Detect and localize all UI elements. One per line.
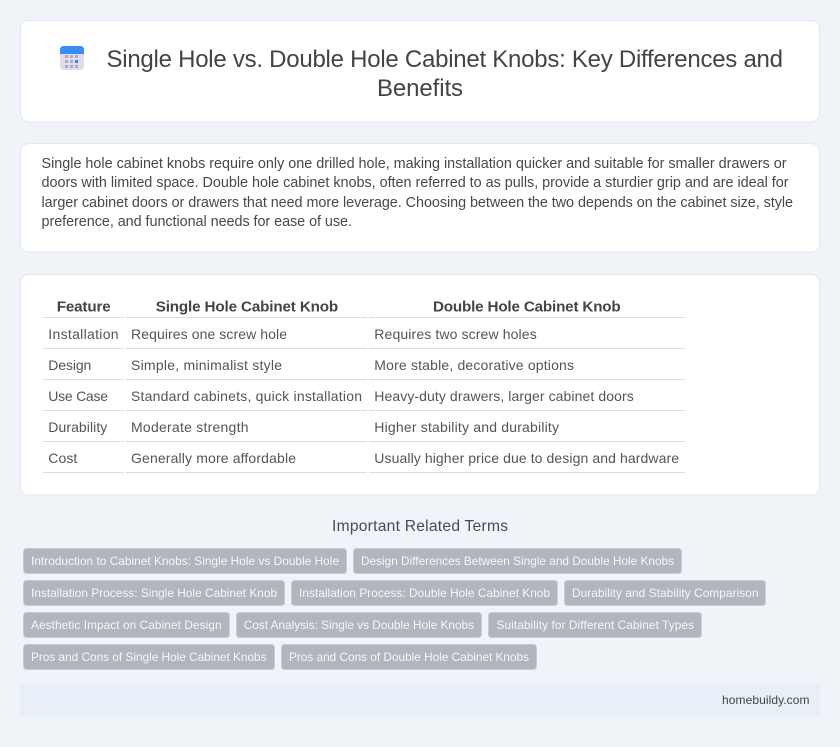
table row: durability: Higher stability and durability — [374, 419, 559, 435]
table row: durability: Durability — [48, 419, 107, 435]
tag — [24, 580, 284, 606]
table row: installation — [48, 326, 537, 342]
table row: use case: Heavy-duty drawers, larger cabinet doors — [374, 388, 634, 404]
tag: Suitability for Different Cabinet Types — [496, 618, 694, 632]
table row: installation: Requires two screw holes — [374, 326, 537, 342]
tag: Pros and Cons of Single Hole Cabinet Knobs — [31, 650, 267, 664]
table header row: Single Hole Cabinet Knob — [156, 299, 338, 316]
text block: introduction paragraph: larger cabinet doors or drawers that need more leverage. Choosing between the two depends on the cabinet size, style — [42, 195, 793, 211]
tag: Installation Process: Double Hole Cabinet Knob — [299, 586, 550, 600]
table row: installation: Requires one screw hole — [131, 326, 287, 342]
title: Benefits — [377, 75, 463, 102]
table row: cost: Cost — [48, 450, 77, 466]
tag — [236, 612, 482, 638]
footer — [20, 683, 820, 717]
table header row — [57, 299, 621, 316]
tag: Aesthetic Impact on Cabinet Design — [31, 618, 222, 632]
tag — [488, 612, 702, 638]
table row: design: More stable, decorative options — [374, 357, 574, 373]
table row: design — [48, 357, 574, 373]
table row: durability — [48, 419, 559, 435]
panel: introduction — [20, 144, 820, 252]
table row: design: Simple, minimalist style — [131, 357, 282, 373]
table row: use case: Standard cabinets, quick installation — [131, 388, 362, 404]
table row: cost — [48, 450, 679, 466]
tag: Introduction to Cabinet Knobs: Single Hole vs Double Hole — [31, 554, 339, 568]
table row: use case — [48, 388, 634, 404]
tag — [564, 580, 766, 606]
tag — [292, 580, 558, 606]
table row: installation: Installation — [48, 326, 119, 342]
panel: title header — [20, 20, 820, 122]
tag — [24, 548, 346, 574]
tag — [24, 644, 274, 670]
panel: comparison table — [20, 274, 820, 495]
table row: cost: Usually higher price due to design and hardware — [374, 450, 679, 466]
icon: calendar — [60, 46, 84, 70]
tag: Pros and Cons of Double Hole Cabinet Knobs — [289, 650, 529, 664]
text block: introduction paragraph — [42, 156, 793, 230]
table row: use case: Use Case — [48, 388, 108, 404]
tag — [24, 612, 230, 638]
table row: cost: Generally more affordable — [131, 450, 296, 466]
tag — [354, 548, 682, 574]
table header row: Feature — [57, 299, 111, 316]
table row: design: Design — [48, 357, 91, 373]
text block: introduction paragraph: doors with limited space. Double hole cabinet knobs, often referred to as pulls, provide a sturdier grip and are ideal for — [42, 175, 789, 191]
text block: introduction paragraph: preference, and functional needs for ease of use. — [42, 214, 352, 230]
tag: Durability and Stability Comparison — [572, 586, 758, 600]
tag: Design Differences Between Single and Double Hole Knobs — [361, 554, 674, 568]
table row: durability: Moderate strength — [131, 419, 248, 435]
tag — [282, 644, 536, 670]
footer source text: homebuildy.com — [722, 693, 810, 707]
tag: Cost Analysis: Single vs Double Hole Knobs — [244, 618, 474, 632]
heading: important related terms: Important Related Terms — [332, 518, 508, 535]
title: Single Hole vs. Double Hole Cabinet Knobs: Key Differences and — [106, 46, 783, 73]
tag list: related terms — [24, 548, 766, 670]
tag: Installation Process: Single Hole Cabinet Knob — [31, 586, 277, 600]
text block: introduction paragraph: Single hole cabinet knobs require only one drilled hole, making installation quicker and suitable for smaller drawers or — [42, 156, 787, 172]
table header row: Double Hole Cabinet Knob — [433, 299, 621, 316]
title — [106, 46, 783, 102]
